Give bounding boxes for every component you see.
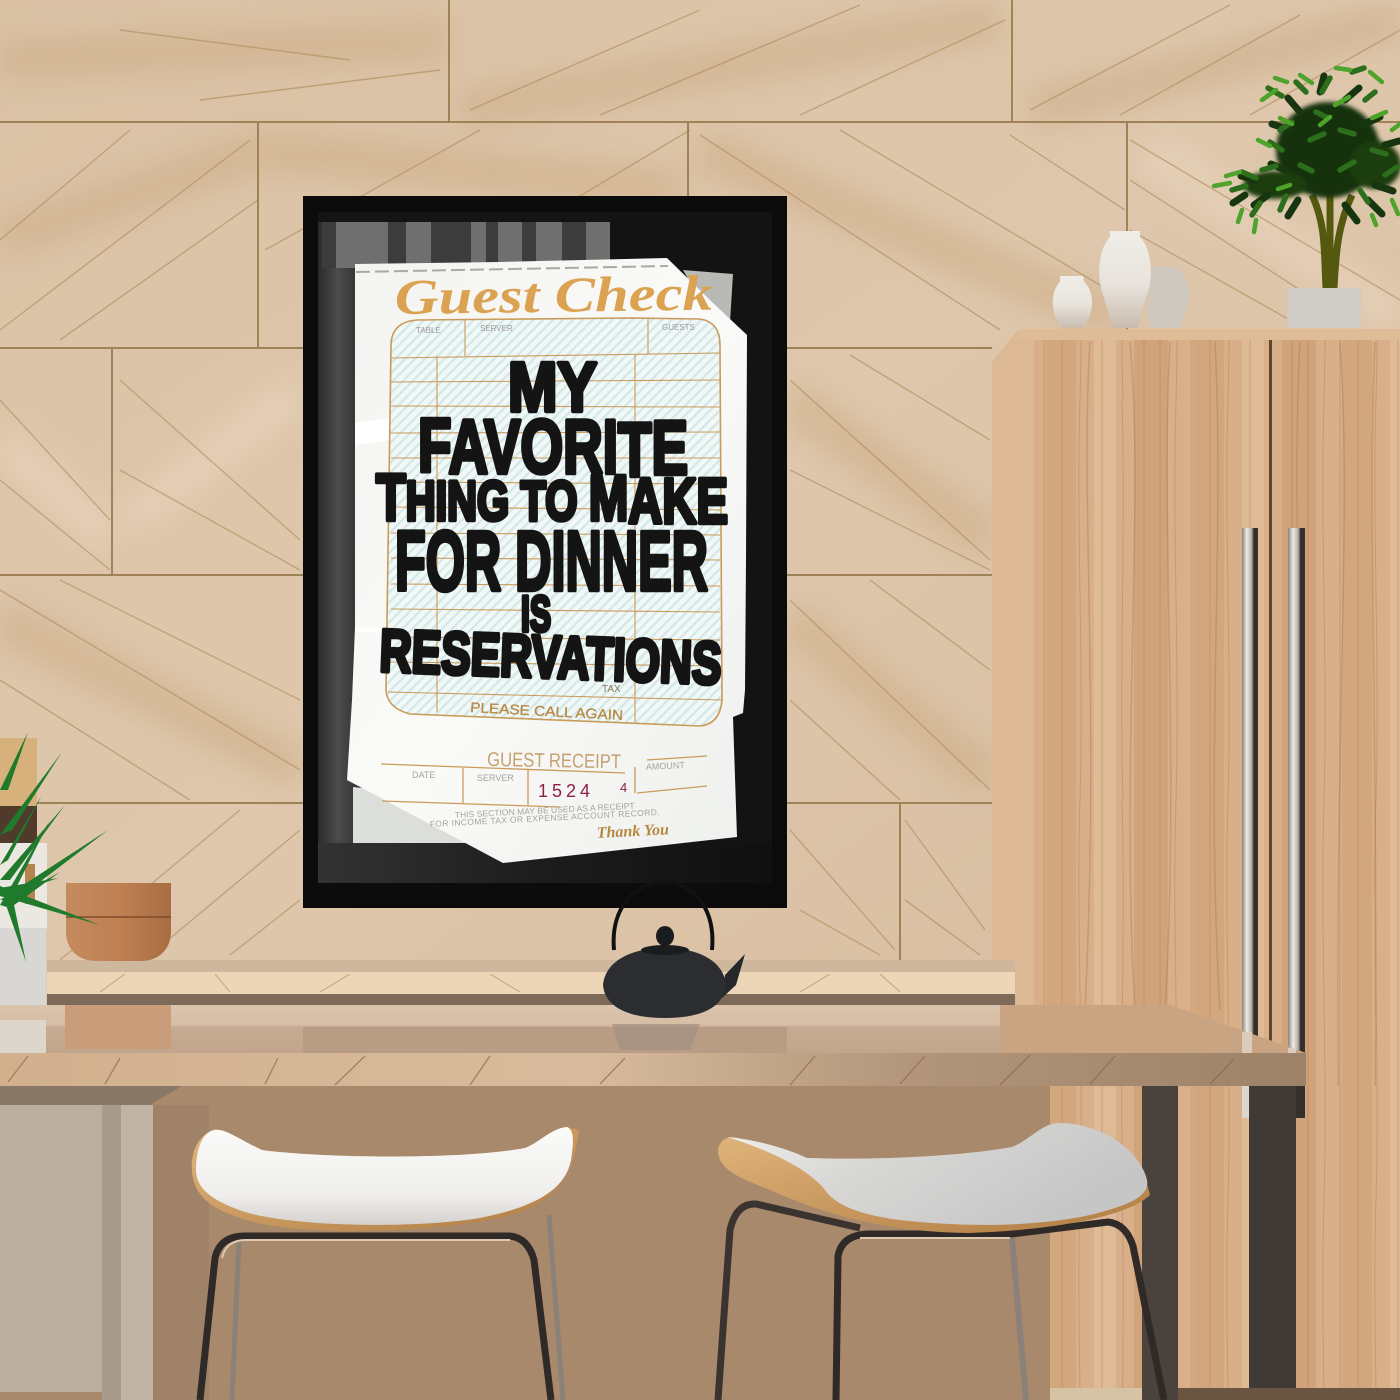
right bar stool xyxy=(718,1123,1164,1400)
guest receipt section: Thank You xyxy=(596,821,669,842)
headline lettering: RESERVATIONS xyxy=(379,617,723,697)
form grid: TABLE xyxy=(416,326,441,335)
guest receipt section: DATE xyxy=(412,770,435,780)
vases on cabinet xyxy=(1053,231,1189,328)
guest receipt section: GUEST RECEIPT xyxy=(487,749,621,773)
guest receipt section: SERVER xyxy=(477,773,514,783)
poster frame xyxy=(303,196,787,908)
headline lettering: MY xyxy=(508,348,597,426)
guest receipt section: AMOUNT xyxy=(646,760,686,772)
form grid xyxy=(386,318,722,726)
back counter shelf xyxy=(47,960,1015,1005)
left plant, pot and bowls xyxy=(0,732,171,1020)
guest receipt section xyxy=(381,749,707,842)
guest receipt section: 4 xyxy=(620,780,627,795)
potted plant top right xyxy=(1214,68,1400,328)
teapot xyxy=(603,882,745,1050)
tall wood cabinet xyxy=(992,329,1400,1400)
form footer: please call again: PLEASE CALL AGAIN xyxy=(470,699,623,723)
headline lettering: IS xyxy=(521,586,551,642)
heading: Guest Check: Guest Check xyxy=(394,265,713,325)
lower cabinet under table xyxy=(0,1086,1400,1400)
wall: marble tiles xyxy=(0,0,1400,1010)
headline lettering: FAVORITE xyxy=(418,403,688,493)
guest receipt section: FOR INCOME TAX OR EXPENSE ACCOUNT RECORD. xyxy=(430,807,660,829)
left bar stool xyxy=(192,1127,579,1400)
cabinet handles xyxy=(1242,528,1305,1118)
form grid: TAX xyxy=(602,684,621,695)
headline lettering xyxy=(376,348,728,697)
table top xyxy=(0,1005,1306,1086)
form grid: GUESTS xyxy=(662,323,695,332)
guest receipt section: 1524 xyxy=(538,781,594,801)
form grid: SERVER xyxy=(480,324,513,333)
guest check paper xyxy=(347,258,747,863)
headline lettering: THING TO MAKE xyxy=(376,460,728,537)
headline lettering: FOR DINNER xyxy=(395,514,708,608)
guest receipt section: THIS SECTION MAY BE USED AS A RECEIPT xyxy=(455,801,635,820)
